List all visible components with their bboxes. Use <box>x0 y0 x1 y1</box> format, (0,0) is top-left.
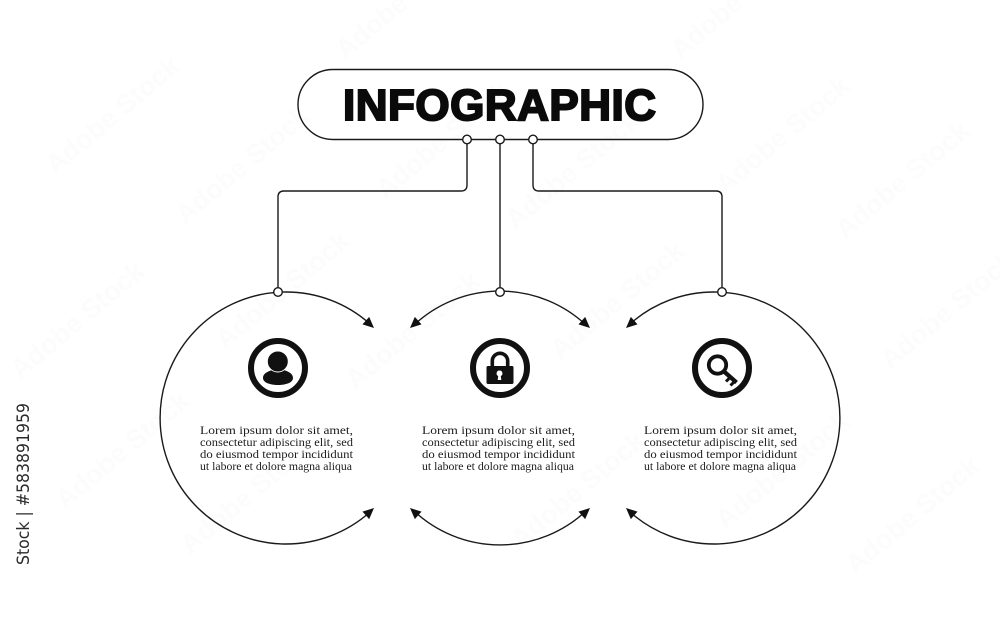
connector nodes <box>274 135 726 296</box>
text block: right: ut labore et dolore magna aliqua <box>644 459 797 473</box>
connector: center <box>499 139 501 292</box>
text block: middle: do eiusmod tempor incididunt <box>422 447 576 461</box>
infographic canvas: Adobe Stock <box>840 450 986 580</box>
text block: left: consectetur adipiscing elit, sed <box>200 435 353 449</box>
text block: left: Lorem ipsum dolor sit amet, <box>200 423 353 437</box>
icon: person <box>251 341 305 395</box>
infographic canvas: Adobe Stock <box>40 50 186 180</box>
icon: key <box>695 341 749 395</box>
text block: right: consectetur adipiscing elit, sed <box>644 435 797 449</box>
panel: left circle <box>160 292 377 544</box>
infographic canvas: Adobe Stock <box>210 225 356 355</box>
infographic canvas: Adobe Stock <box>545 235 691 365</box>
infographic canvas: Adobe Stock <box>340 265 486 395</box>
text block: left <box>200 423 354 473</box>
icon: padlock <box>473 341 527 395</box>
title pill <box>298 70 703 140</box>
title: INFOGRAPHIC <box>343 81 656 130</box>
text block: middle: Lorem ipsum dolor sit amet, <box>422 423 575 437</box>
connector: right <box>533 139 722 292</box>
infographic canvas: Adobe Stock <box>830 115 976 245</box>
infographic canvas: Adobe Stock <box>50 385 196 515</box>
infographic canvas: Adobe Stock <box>370 75 516 205</box>
infographic canvas: Adobe Stock <box>170 100 316 230</box>
text block: left: do eiusmod tempor incididunt <box>200 447 354 461</box>
text block: right: do eiusmod tempor incididunt <box>644 447 798 461</box>
text block: right: Lorem ipsum dolor sit amet, <box>644 423 797 437</box>
text block: left: ut labore et dolore magna aliqua <box>200 459 353 473</box>
infographic canvas: Adobe Stock <box>500 105 646 235</box>
infographic canvas: Adobe Stock <box>175 430 321 560</box>
panel: middle circle <box>407 291 593 545</box>
text block: middle: consectetur adipiscing elit, sed <box>422 435 575 449</box>
text block: middle <box>422 423 576 473</box>
infographic canvas: Adobe Stock <box>5 255 151 385</box>
side credit: Stock | #583891959 <box>14 403 34 565</box>
infographic canvas: Adobe Stock <box>505 425 651 555</box>
connector: left <box>278 139 467 292</box>
infographic canvas: Adobe Stock <box>710 70 856 200</box>
panel: right circle <box>623 292 840 544</box>
text block: middle: ut labore et dolore magna aliqua <box>422 459 575 473</box>
text block: right <box>644 423 798 473</box>
infographic canvas: Adobe Stock <box>710 405 856 535</box>
